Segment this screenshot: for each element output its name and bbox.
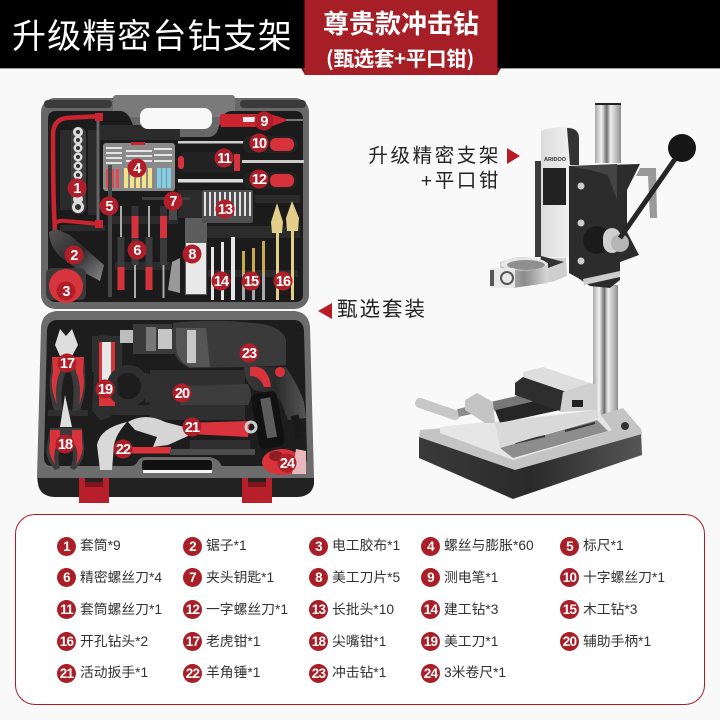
drill press stand [419,103,696,499]
feed body [569,164,657,288]
legend item 2 [183,537,247,556]
legend panel: 11 [60,602,73,617]
legend panel: 10 [563,570,576,585]
number badges 1-16: 5 [105,199,113,215]
bench vice [420,367,598,448]
legend panel: 23 [312,666,325,680]
tool: needle-nose pliers [46,395,84,470]
legend panel [15,514,705,705]
legend panel: 套筒*9 [80,538,121,553]
legend panel: 24 [424,666,437,680]
tool: tape measure [262,449,306,475]
number badges 1-16: 2 [70,248,78,264]
tool: socket screwdriver [178,152,304,173]
title: 升级精密台钻支架 [12,9,293,58]
foam relief [60,125,300,277]
tool: voltage tester pen [220,114,303,127]
legend panel: 老虎钳*1 [206,634,260,648]
number badges 17-24: 18 [58,437,73,453]
number badges 17-24: 23 [242,346,257,362]
number badges 1-16: 7 [169,194,177,210]
legend panel: 冲击钻*1 [332,665,386,680]
tool: hole saw spade bits [271,201,299,300]
legend panel: 19 [424,634,437,649]
number badges 17-24: 24 [280,456,295,472]
legend panel: 测电笔*1 [444,570,498,584]
legend panel: 开孔钻头*2 [80,634,148,648]
legend panel: 活动扳手*1 [80,665,148,680]
legend panel: 羊角锤*1 [206,665,260,680]
number badges 1-16: 14 [214,274,229,290]
top case: tool tray [41,95,309,309]
legend panel: 美工刀*1 [444,634,498,648]
legend panel: 一字螺丝刀*1 [206,602,288,616]
legend panel: 锯子*1 [206,538,247,553]
tool: chuck key [142,197,190,220]
tool: long bits [202,190,253,223]
foam relief [48,336,250,452]
number badges 1-16: 11 [217,151,232,167]
legend item 21 [57,664,148,683]
number badges 1-16: 1 [73,181,81,197]
legend item 12 [183,600,288,619]
label: upgraded stand and vise [368,145,501,192]
tool: wood drill bits [242,241,265,300]
legend panel: 7 [189,570,196,585]
legend panel: 17 [186,634,199,649]
number badges 1-16: 8 [188,247,196,263]
legend item 10 [560,568,665,587]
arrow: kit label [318,303,332,319]
legend panel: 9 [427,570,434,585]
number badges 17-24: 22 [116,442,131,458]
legend panel: 5 [566,538,573,554]
legend panel: 螺丝与膨胀*60 [444,538,534,553]
legend item 1 [57,537,121,556]
legend panel: 尖嘴钳*1 [332,634,386,648]
legend panel: 夹头钥匙*1 [206,570,274,584]
tool: impact drill [120,321,306,440]
badge heading: 尊贵款冲击钻 [323,4,479,41]
number badges 17-24: 20 [175,386,190,402]
label: upgraded stand and vise: +平口钳 [421,170,501,192]
red badge: premium impact drill [301,0,501,75]
number badges 17-24: 17 [60,356,75,372]
number badges 17-24 [56,344,296,472]
legend item 20 [560,632,651,651]
legend panel: 14 [424,602,437,617]
number badges 1-16: 10 [252,136,267,152]
legend panel: 套筒螺丝刀*1 [80,602,162,616]
tool: utility blades [168,218,207,295]
legend item 9 [421,568,498,587]
legend item 22 [183,664,260,683]
legend item 17 [183,632,260,651]
legend panel: 长批头*10 [332,602,394,616]
tool: bit holder case [250,390,286,450]
legend item 8 [309,568,400,587]
legend panel: 6 [63,570,70,585]
tool: marking ruler [108,165,112,297]
legend panel: 木工钻*3 [583,602,637,616]
main illustration [37,95,696,503]
tool: claw hammer [97,422,255,470]
legend panel: 22 [186,666,199,680]
legend panel: 21 [60,666,73,680]
badge subheading: (甄选套+平口钳) [326,42,474,72]
column [593,103,621,417]
tool: auxiliary handle [111,369,251,405]
legend panel: 建工钻*3 [444,602,498,616]
number badges 1-16: 13 [218,202,233,218]
legend item 19 [421,632,498,651]
number badges 1-16: 15 [244,274,259,290]
legend panel: 美工刀片*5 [332,570,400,584]
number badges 1-16: 9 [260,114,268,130]
label: selected kit: 甄选套装 [337,298,427,321]
tool: adjustable wrench [128,417,256,447]
feed lever [620,134,696,238]
header bar [0,0,720,69]
legend panel: 13 [312,602,325,617]
legend panel: 标尺*1 [583,538,624,553]
label: upgraded stand and vise: 升级精密支架 [368,145,501,167]
legend panel: 15 [563,602,576,617]
legend item 16 [57,632,148,651]
legend panel: 12 [186,602,199,617]
tool: utility knife [92,334,118,420]
legend item 5 [560,537,624,556]
legend item 23 [309,664,386,683]
legend panel: 20 [563,634,576,649]
tool: sockets [71,127,86,214]
legend panel: 2 [189,538,196,554]
number badges 1-16: 4 [133,161,141,177]
brand label: ARIDOO [544,157,567,163]
legend panel: 16 [60,634,73,649]
legend panel: 4 [427,538,434,554]
silver carriage plate [535,127,579,257]
legend panel: 18 [312,634,325,649]
legend item 6 [57,568,162,587]
arrow: stand label [507,148,520,164]
tool: cross screwdriver [178,136,297,153]
legend item 14 [421,600,498,619]
tool: screw and anchor box [103,142,175,191]
legend item 11 [57,600,162,619]
tool: masonry drill bits [211,237,235,300]
latches [79,478,272,503]
legend panel: 3 [315,538,322,554]
legend panel: 十字螺丝刀*1 [583,570,665,584]
legend item 24 [421,664,506,683]
legend item 18 [309,632,386,651]
number badges 1-16: 6 [133,243,141,259]
legend panel: 辅助手柄*1 [583,634,651,648]
number badges 1-16: 12 [252,172,267,188]
legend item 13 [309,600,394,619]
legend item 15 [560,600,637,619]
number badges 17-24: 21 [185,420,200,436]
number badges 1-16: 16 [276,274,291,290]
tool: hacksaw [49,113,104,281]
legend panel: 精密螺丝刀*4 [80,570,162,584]
legend item 3 [309,537,400,556]
tool: precision screwdrivers [118,206,167,298]
tool: electrical tape [46,268,86,303]
legend item 7 [183,568,274,587]
number badges 1-16: 3 [62,284,70,300]
legend panel: 8 [315,570,322,585]
legend panel: 1 [63,538,70,554]
legend panel: 3米卷尺*1 [444,665,506,680]
number badges 17-24: 19 [98,382,113,398]
tool: flat screwdriver [178,172,297,189]
base plate [419,408,642,499]
legend item 4 [421,537,534,556]
bottom case: drill tray [37,311,314,503]
number badges 1-16 [56,112,292,300]
drill clamp ring [490,256,567,288]
legend panel: 电工胶布*1 [332,538,400,553]
tool: combination pliers [50,329,85,411]
